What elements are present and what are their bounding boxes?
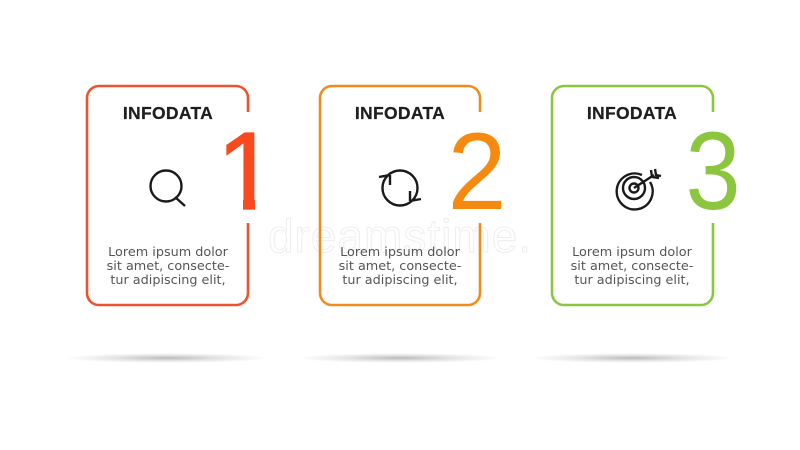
card 2 outline [320, 86, 480, 305]
panel: card 2 [320, 86, 506, 305]
card 1 number: 1 [216, 110, 278, 233]
card 1 outline [87, 86, 248, 305]
card 1 body text: Lorem ipsum dolor [108, 245, 229, 260]
icon: target with arrow [617, 169, 661, 209]
card 1 body text: sit amet, consecte- [107, 259, 229, 274]
card 1 body text: tur adipiscing elit, [110, 273, 226, 288]
card 2 body text: sit amet, consecte- [339, 259, 461, 274]
card 2 body text: Lorem ipsum dolor [340, 245, 461, 260]
card 2 body text: tur adipiscing elit, [342, 273, 458, 288]
card 3 body text: sit amet, consecte- [571, 259, 693, 274]
card 2 heading: INFODATA [355, 103, 445, 123]
shadow under card 3 [530, 353, 734, 363]
icon: refresh cycle [379, 170, 421, 206]
card 3 body text: tur adipiscing elit, [574, 273, 690, 288]
panel: card 1 [87, 86, 278, 305]
card 1 heading: INFODATA [123, 103, 213, 123]
card 3 body text: Lorem ipsum dolor [572, 245, 693, 260]
card 3 outline [552, 86, 713, 305]
card 3 number: 3 [685, 110, 741, 233]
icon: magnifier [150, 170, 185, 206]
card 2 number: 2 [448, 109, 506, 232]
panel: card 3 [552, 86, 741, 305]
watermark: dreamstime. [268, 210, 532, 262]
card 3 heading: INFODATA [587, 103, 677, 123]
shadow under card 2 [298, 353, 502, 363]
shadow under card 1 [65, 353, 269, 363]
